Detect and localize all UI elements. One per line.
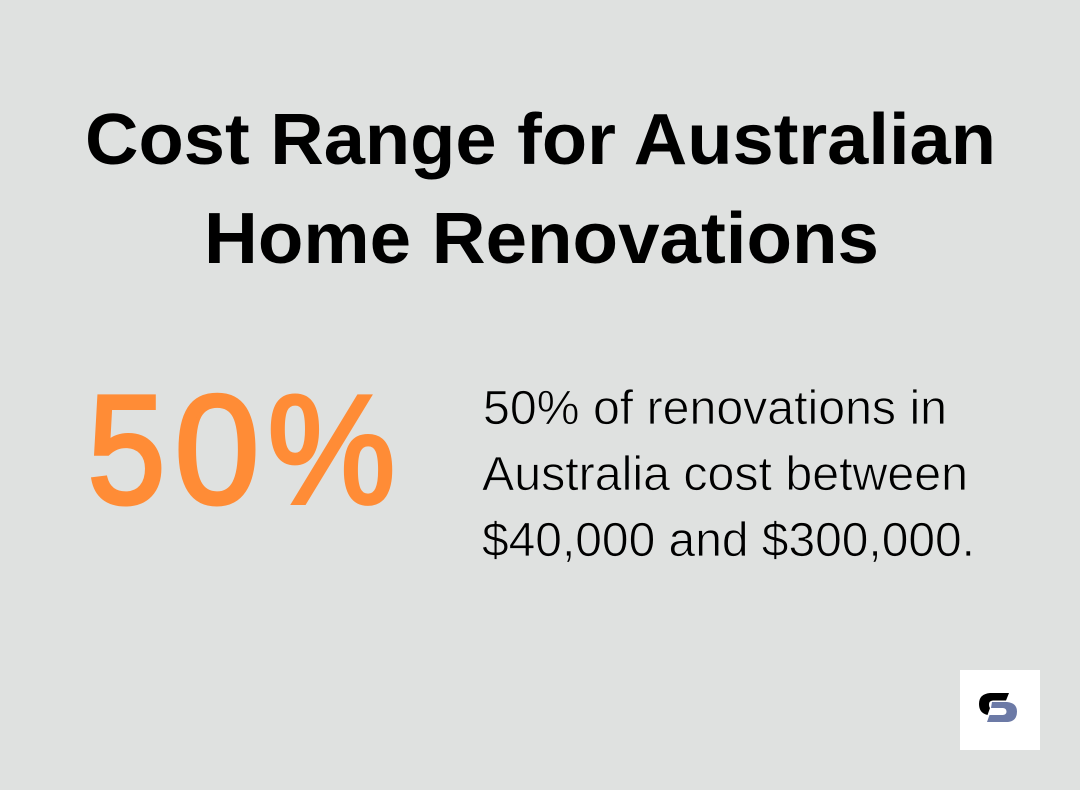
big statistic: 50% — [88, 363, 396, 536]
logo mark: black S half — [979, 693, 1009, 715]
title — [85, 100, 996, 279]
logo badge — [960, 670, 1040, 750]
description text: 50% of renovations in — [483, 382, 947, 435]
big statistic: 50%: % — [268, 363, 396, 536]
title: Home Renovations — [204, 199, 879, 279]
description text: Australia cost between — [482, 448, 968, 501]
description text — [482, 382, 975, 567]
description text: $40,000 and $300,000. — [482, 514, 975, 567]
big statistic: 50%: 5 — [88, 363, 166, 536]
logo mark: blue S half — [987, 702, 1017, 722]
big statistic: 50%: 0 — [174, 363, 260, 536]
title: Cost Range for Australian — [85, 100, 996, 180]
